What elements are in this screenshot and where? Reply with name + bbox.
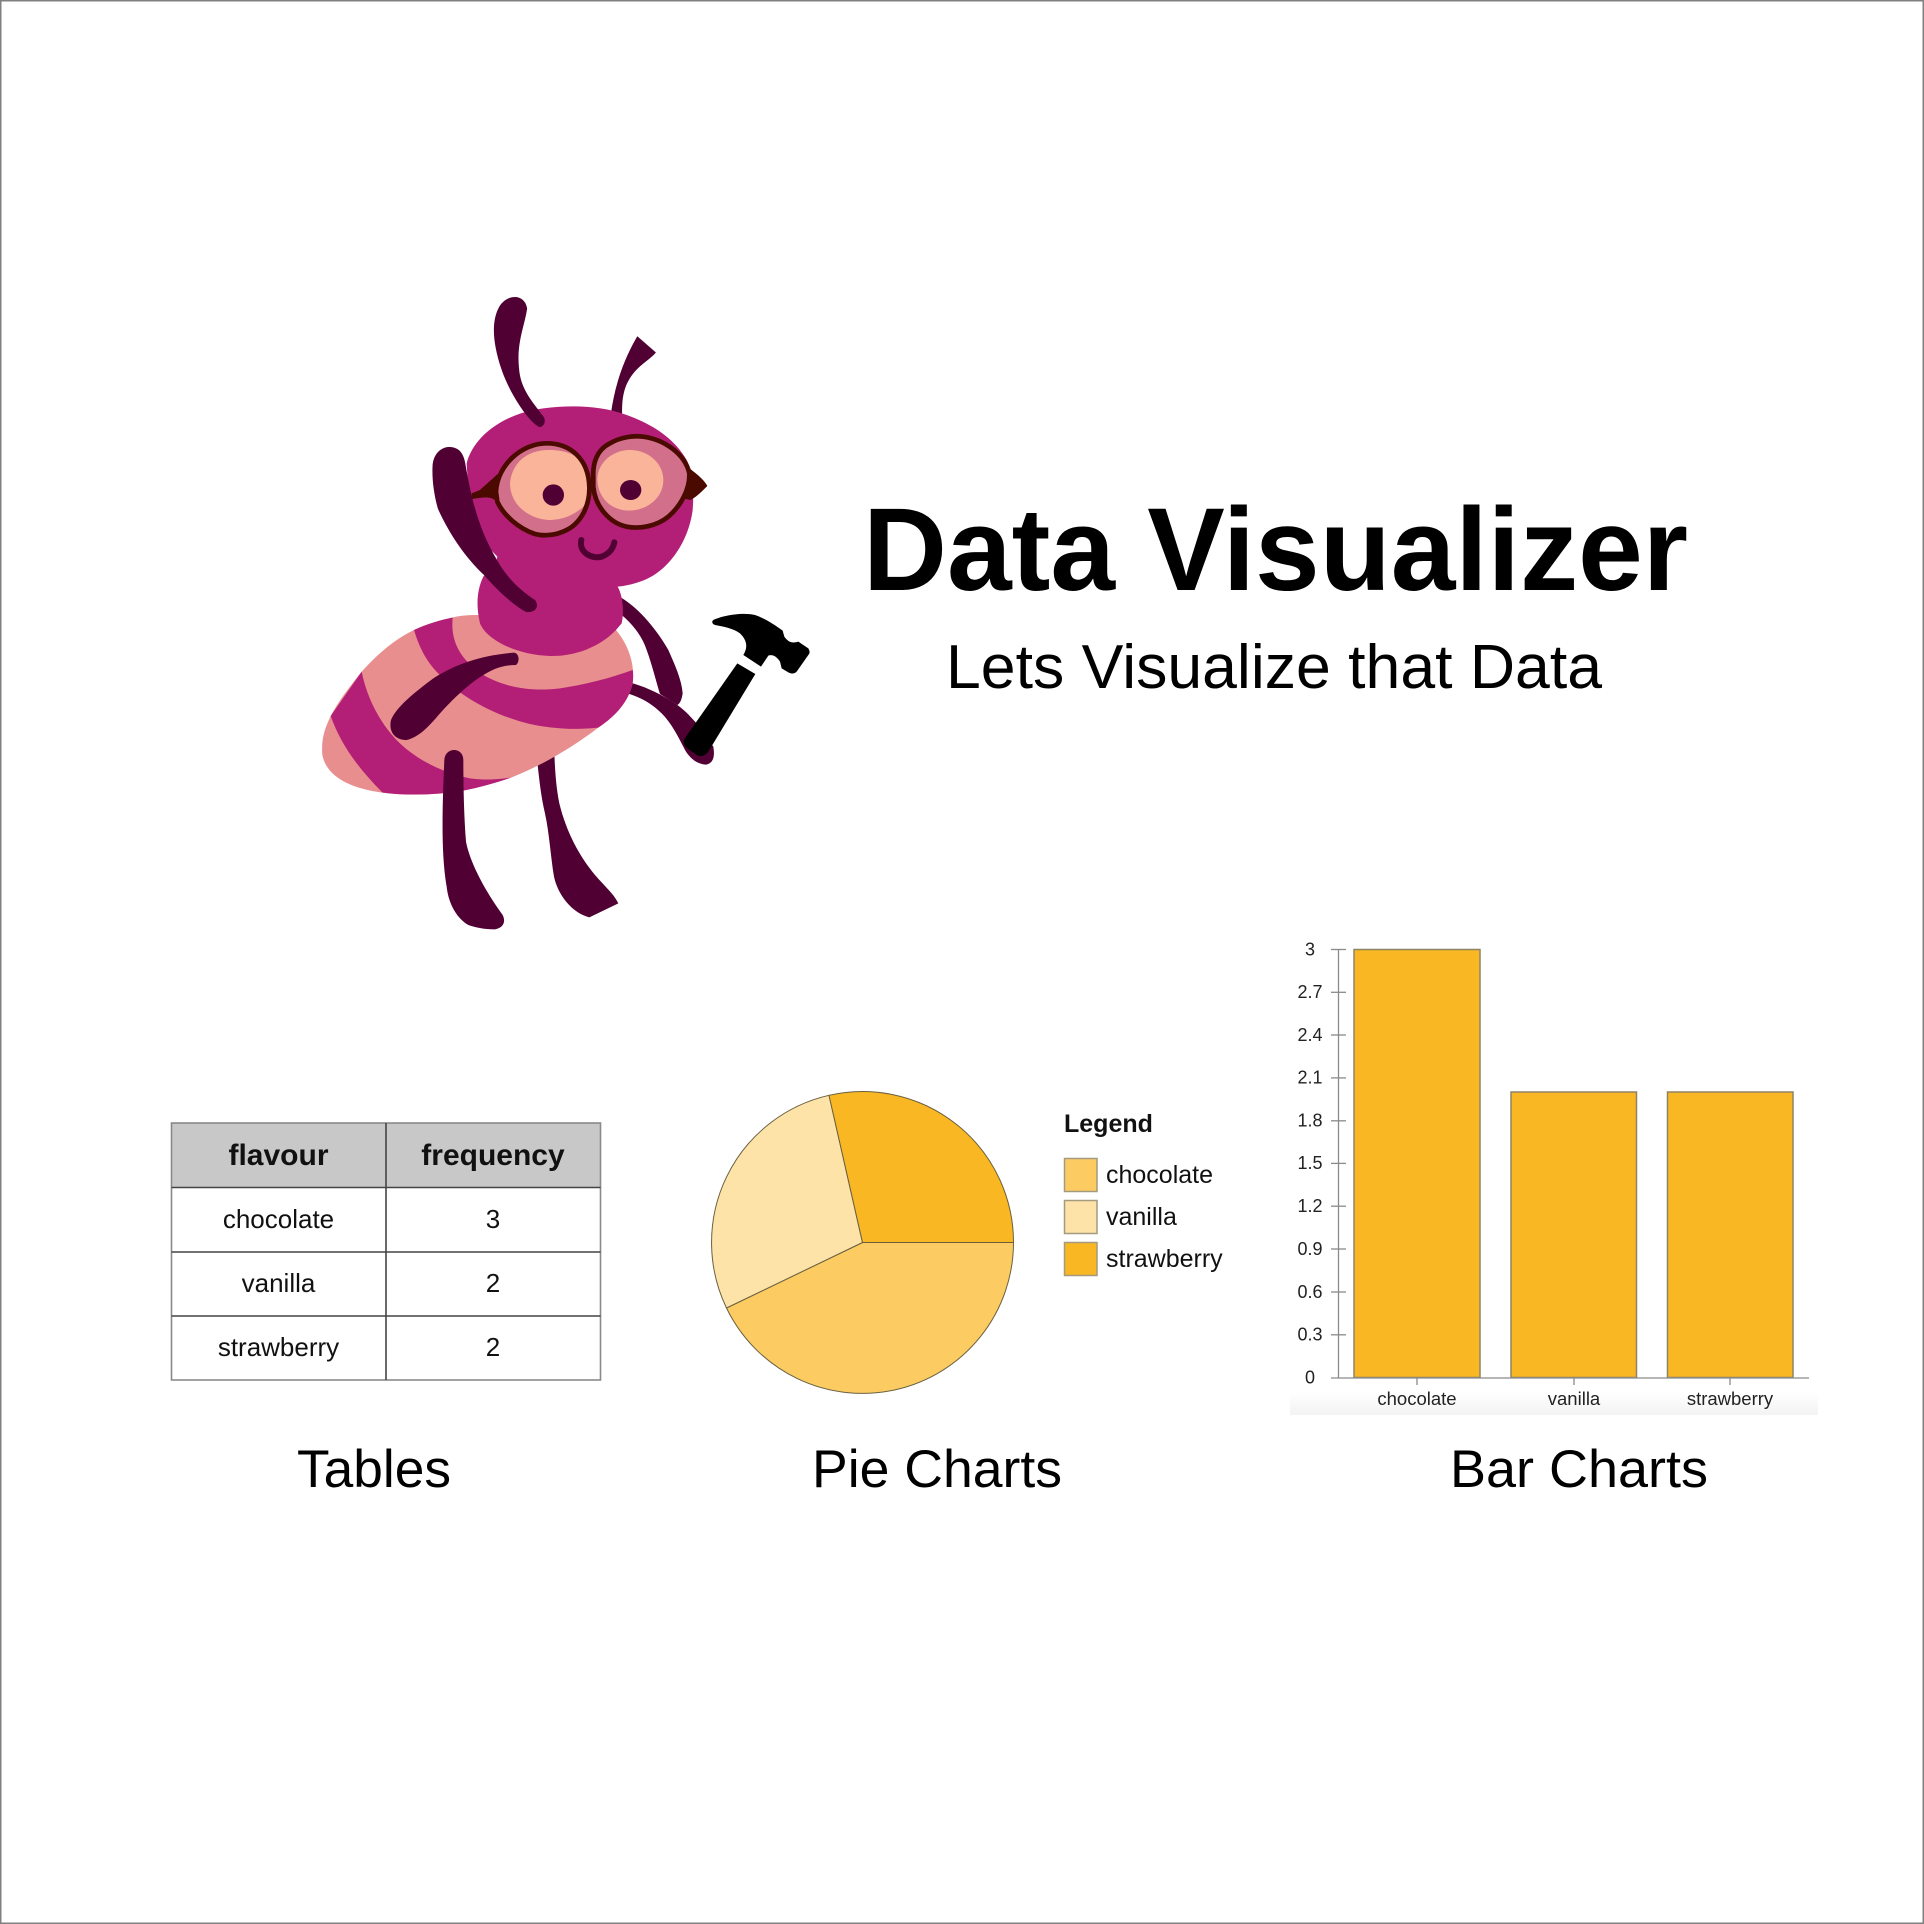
- y axis labels: 0.3: [1297, 1324, 1323, 1344]
- bar chart: [1290, 940, 1818, 1415]
- y axis labels: 2.4: [1297, 1025, 1323, 1045]
- ant: back leg and abdomen: [317, 610, 640, 917]
- legend: chocolate: chocolate: [1106, 1161, 1213, 1189]
- bars: [1354, 950, 1793, 1378]
- title: Data Visualizer: [863, 484, 1688, 616]
- legend: Legend: [1064, 1110, 1153, 1138]
- pie chart: [712, 1092, 1014, 1393]
- table rows: vanilla: [242, 1268, 316, 1298]
- caption: bar charts: Bar Charts: [1450, 1440, 1708, 1499]
- slice: chocolate: [726, 1242, 1014, 1393]
- legend: strawberry: strawberry: [1106, 1245, 1223, 1273]
- subtitle: Lets Visualize that Data: [946, 633, 1603, 702]
- y axis labels: 1.5: [1297, 1153, 1323, 1173]
- y axis labels: 1.2: [1297, 1196, 1323, 1216]
- x axis labels: strawberry: [1687, 1388, 1774, 1409]
- ant: glasses temples: [472, 468, 707, 503]
- x axis labels: [1377, 1388, 1774, 1409]
- slice: vanilla: [712, 1095, 862, 1308]
- table rows: chocolate: [223, 1204, 334, 1234]
- caption: tables: Tables: [297, 1440, 451, 1499]
- legend: chocolate: [1064, 1158, 1213, 1192]
- legend: [1064, 1110, 1223, 1276]
- table rows: 3: [486, 1204, 500, 1234]
- ant: right lens and eye: [593, 436, 689, 528]
- y axis labels: 2.7: [1297, 982, 1323, 1002]
- axes: [1331, 950, 1809, 1385]
- legend: vanilla: [1064, 1200, 1177, 1234]
- icon: hammer: [684, 614, 810, 756]
- y axis labels: 0.9: [1297, 1239, 1323, 1259]
- ant: raised arm: [432, 447, 537, 612]
- x axis labels: vanilla: [1548, 1388, 1601, 1409]
- y axis labels: 3: [1305, 940, 1315, 960]
- ant: antenna right: [611, 336, 656, 417]
- table rows: strawberry: [218, 1332, 339, 1362]
- ant: smile: [581, 540, 614, 557]
- y axis labels: 1.8: [1297, 1110, 1323, 1130]
- table rows: 2: [486, 1268, 500, 1298]
- ant mascot with hammer: [317, 297, 810, 929]
- table rows: 2: [486, 1332, 500, 1362]
- table header: flavour: [228, 1139, 329, 1172]
- ant: front arm and front leg: [390, 653, 519, 929]
- ant: head and neck: [467, 406, 707, 656]
- x axis labels: chocolate: [1377, 1388, 1457, 1409]
- ant: left lens and eye: [496, 443, 589, 535]
- y axis labels: 2.1: [1297, 1068, 1323, 1088]
- table rows: [218, 1204, 500, 1362]
- legend: vanilla: vanilla: [1106, 1203, 1177, 1231]
- legend: strawberry: [1064, 1242, 1223, 1276]
- y axis labels: 0: [1305, 1368, 1315, 1388]
- table: [172, 1123, 600, 1380]
- ant: antenna left: [494, 297, 545, 427]
- y axis labels: 0.6: [1297, 1282, 1323, 1302]
- table header: frequency: [421, 1139, 565, 1172]
- slice: strawberry: [829, 1092, 1014, 1242]
- table header: [228, 1139, 565, 1172]
- y axis labels: [1297, 940, 1323, 1388]
- caption: pie charts: Pie Charts: [812, 1440, 1062, 1499]
- ant: right arms: [621, 597, 714, 765]
